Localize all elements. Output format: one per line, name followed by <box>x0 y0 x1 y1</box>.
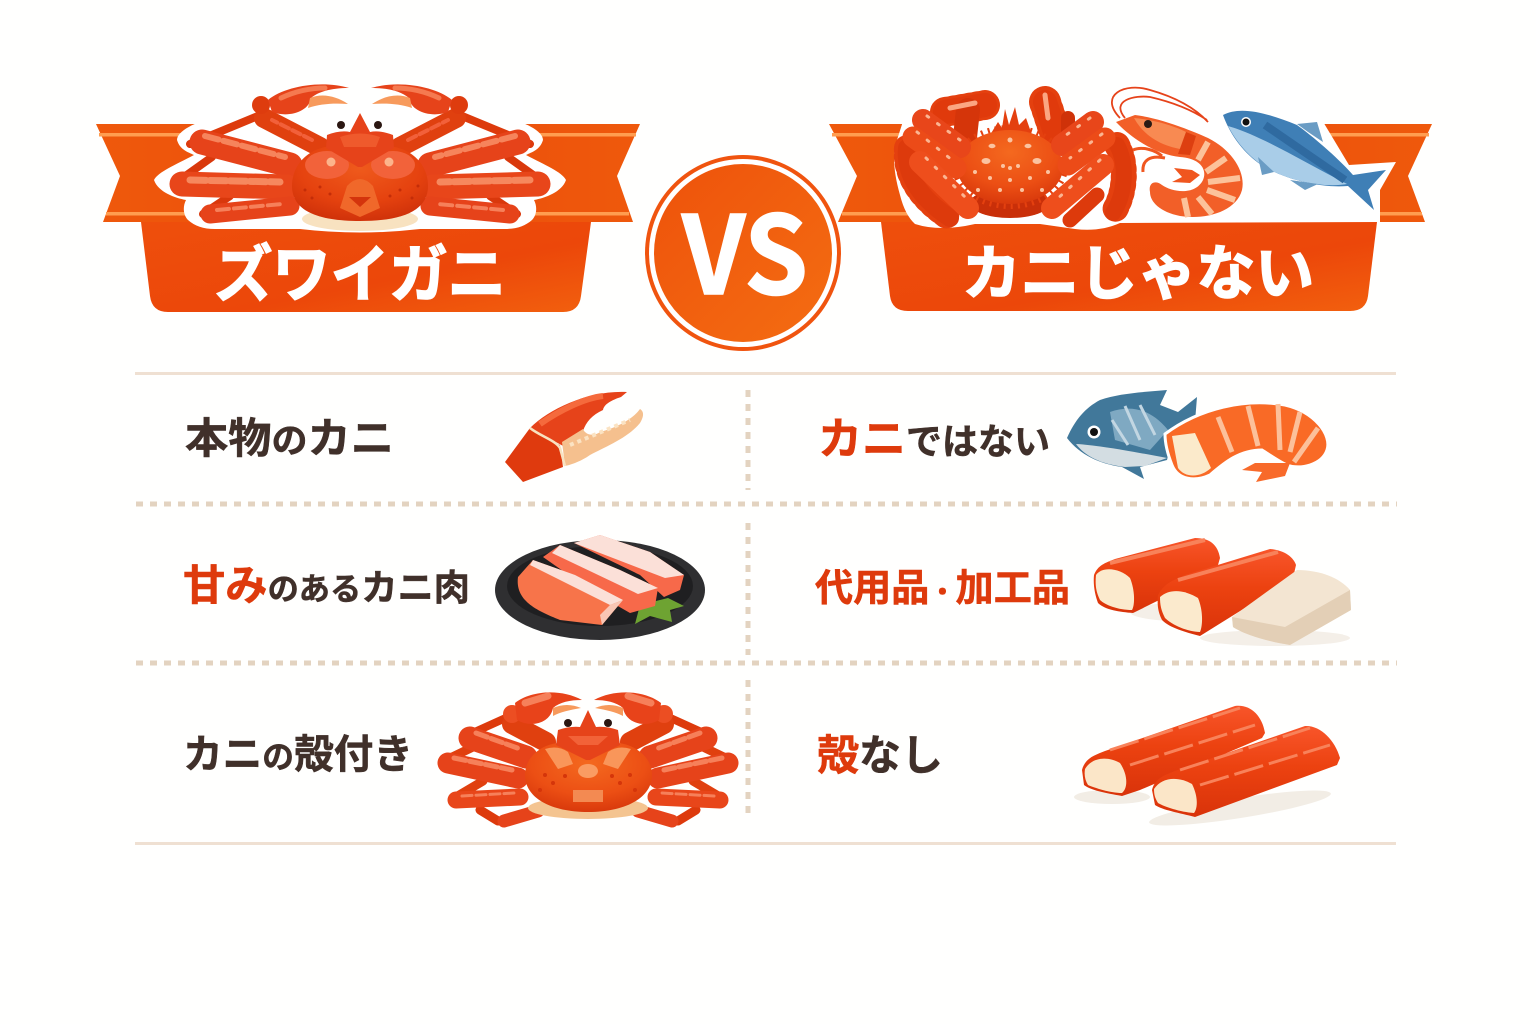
right title: カニじゃない <box>962 226 1314 311</box>
right header: カニじゃない banner <box>829 80 1432 311</box>
row 3 right label: 殻なし <box>817 722 943 783</box>
right title plate <box>881 222 1377 311</box>
left header: ズワイガニ banner <box>96 84 640 314</box>
icon: plate of crab meat <box>495 535 705 640</box>
row 3 left label: カニの殻付き <box>183 722 413 780</box>
row 1 right label: カニではない <box>818 403 1050 467</box>
left title: ズワイガニ <box>214 224 506 314</box>
VS badge <box>645 155 841 351</box>
icon: surimi sticks and white fish paste <box>1094 538 1351 646</box>
row 2 right label: 代用品・加工品 <box>815 557 1070 612</box>
icon: snow crab <box>154 84 566 232</box>
VS badge: VS <box>681 170 808 326</box>
left ribbon <box>96 124 640 222</box>
icon: fish <box>1223 111 1386 210</box>
right ribbon <box>829 124 1432 222</box>
white sticker backing <box>894 80 1396 230</box>
icon: king crab <box>907 95 1124 220</box>
icon: surimi sticks <box>1074 706 1340 832</box>
left title plate <box>141 222 591 312</box>
icon: fish and shrimp <box>1067 390 1328 482</box>
icon: crab claw <box>505 392 643 482</box>
row 2 left label: 甘みのあるカニ肉 <box>183 552 470 613</box>
icon: shrimp <box>1112 88 1243 217</box>
table rules <box>135 372 1397 845</box>
comparison table <box>135 372 1397 845</box>
row 1 left label: 本物のカニ <box>185 405 394 466</box>
icon: whole snow crab <box>446 692 730 821</box>
